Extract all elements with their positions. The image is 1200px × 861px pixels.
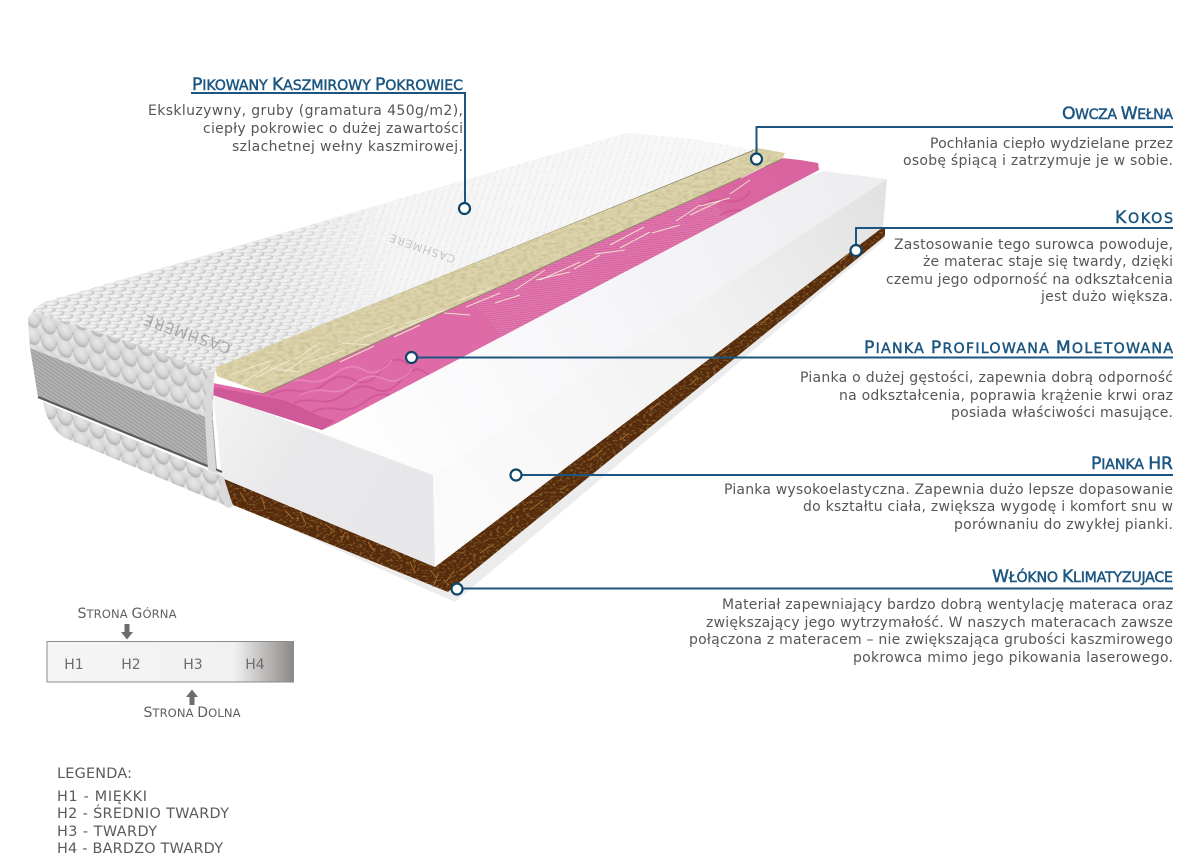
description: pokrowca mimo jego pikowania laserowego.	[853, 650, 1173, 666]
grey band	[30, 348, 217, 470]
legend: H3 - TWARDY	[57, 824, 157, 840]
layer: coconut	[222, 227, 885, 592]
leader line	[522, 474, 1173, 476]
marker	[850, 245, 862, 256]
callout: Włókno Klimatyzujace	[452, 567, 1173, 666]
description: szlachetnej wełny kaszmirowej.	[232, 139, 463, 155]
legend	[57, 766, 229, 857]
description: jest dużo większa.	[1040, 289, 1173, 305]
description: porównaniu do zwykłej pianki.	[954, 517, 1173, 533]
description: czemu jego odporność na odkształcenia	[886, 272, 1173, 288]
description: Zastosowanie tego surowca powoduje,	[894, 237, 1173, 253]
description: Materiał zapewniający bardzo dobrą wentylację materaca oraz	[722, 597, 1173, 613]
leader line	[191, 93, 465, 203]
layer: quilted cashmere cover	[0, 120, 770, 508]
cover lettering: CASHMERE	[141, 310, 233, 357]
scale labels: H2	[121, 657, 141, 673]
leader line	[417, 356, 1173, 358]
description: na odkształcenia, poprawia krążenie krwi oraz	[839, 388, 1173, 404]
bottom sheet	[225, 232, 884, 602]
description	[800, 370, 1173, 421]
callout: Pikowany Kaszmirowy Pokrowiec	[148, 75, 470, 214]
description	[689, 597, 1173, 666]
callout: Pianka Profilowana Moletowana	[406, 338, 1173, 421]
marker	[452, 584, 462, 594]
legend: H4 - BARDZO TWARDY	[57, 841, 223, 857]
heading: KOKOS	[1115, 208, 1173, 228]
description: ciepły pokrowiec o dużej zawartości	[203, 121, 463, 137]
bottom side label: STRONA DOLNA	[144, 705, 241, 721]
description: posiada właściwości masujące.	[951, 405, 1173, 421]
description: Pianka wysokoelastyczna. Zapewnia dużo lepsze dopasowanie	[724, 482, 1173, 498]
heading: PIANKA HR	[1091, 454, 1173, 474]
description: że materac staje się twardy, dzięki	[923, 254, 1173, 270]
lower quilted part	[43, 402, 229, 507]
scale labels	[64, 657, 265, 673]
layer: HR foam	[213, 171, 887, 567]
leader line	[856, 228, 1173, 245]
scale labels: H4	[245, 657, 265, 673]
heading: PIANKA PROFILOWANA MOLETOWANA	[864, 338, 1173, 358]
cover fold	[205, 367, 233, 508]
heading: WŁÓKNO KLIMATYZUJACE	[992, 567, 1173, 587]
marker	[510, 470, 522, 480]
leader line	[463, 588, 1173, 590]
description: zwiększający jego wytrzymałość. W naszych materacach zawsze	[706, 615, 1173, 631]
marker	[751, 154, 762, 164]
description	[724, 482, 1173, 533]
mattress cross-section illustration	[0, 120, 887, 602]
layer: quilted cashmere cover: CASHMERE	[387, 231, 457, 265]
callout: Pianka HR	[510, 454, 1173, 533]
heading: OWCZA WEŁNA	[1062, 104, 1173, 124]
scale labels: H1	[64, 657, 84, 673]
scale labels: H3	[183, 657, 203, 673]
layer: sheep wool	[215, 148, 785, 394]
scale bar	[47, 642, 294, 682]
description	[903, 136, 1173, 169]
description: Pochłania ciepło wydzielane przez	[930, 136, 1173, 152]
top side label: STRONA GÓRNA	[78, 606, 177, 622]
leader line	[756, 127, 1173, 153]
heading: PIKOWANY KASZMIROWY POKROWIEC	[192, 75, 463, 95]
callout: Kokos	[850, 208, 1173, 305]
description: Ekskluzywny, gruby (gramatura 450g/m2),	[148, 103, 463, 119]
description: osobę śpiącą i zatrzymuje je w sobie.	[903, 153, 1173, 169]
arrow: top side	[121, 624, 133, 640]
marker	[459, 203, 470, 214]
firmness scale	[47, 606, 294, 721]
marker	[406, 352, 417, 363]
description: połączona z materacem – nie zwiększająca grubości kaszmirowego	[689, 632, 1173, 648]
legend: LEGENDA:	[57, 766, 132, 782]
description	[148, 103, 463, 155]
legend: H2 - ŚREDNIO TWARDY	[57, 804, 229, 822]
arrow: bottom side	[186, 690, 198, 705]
description: do kształtu ciała, zwiększa wygodę i komfort snu w	[803, 499, 1173, 515]
layer: profiled pink foam	[213, 158, 819, 430]
callout: Owcza Wełna	[751, 104, 1173, 169]
description: Pianka o dużej gęstości, zapewnia dobrą odporność	[800, 370, 1173, 386]
description	[886, 237, 1173, 305]
legend: H1 - MIĘKKI	[57, 789, 147, 805]
